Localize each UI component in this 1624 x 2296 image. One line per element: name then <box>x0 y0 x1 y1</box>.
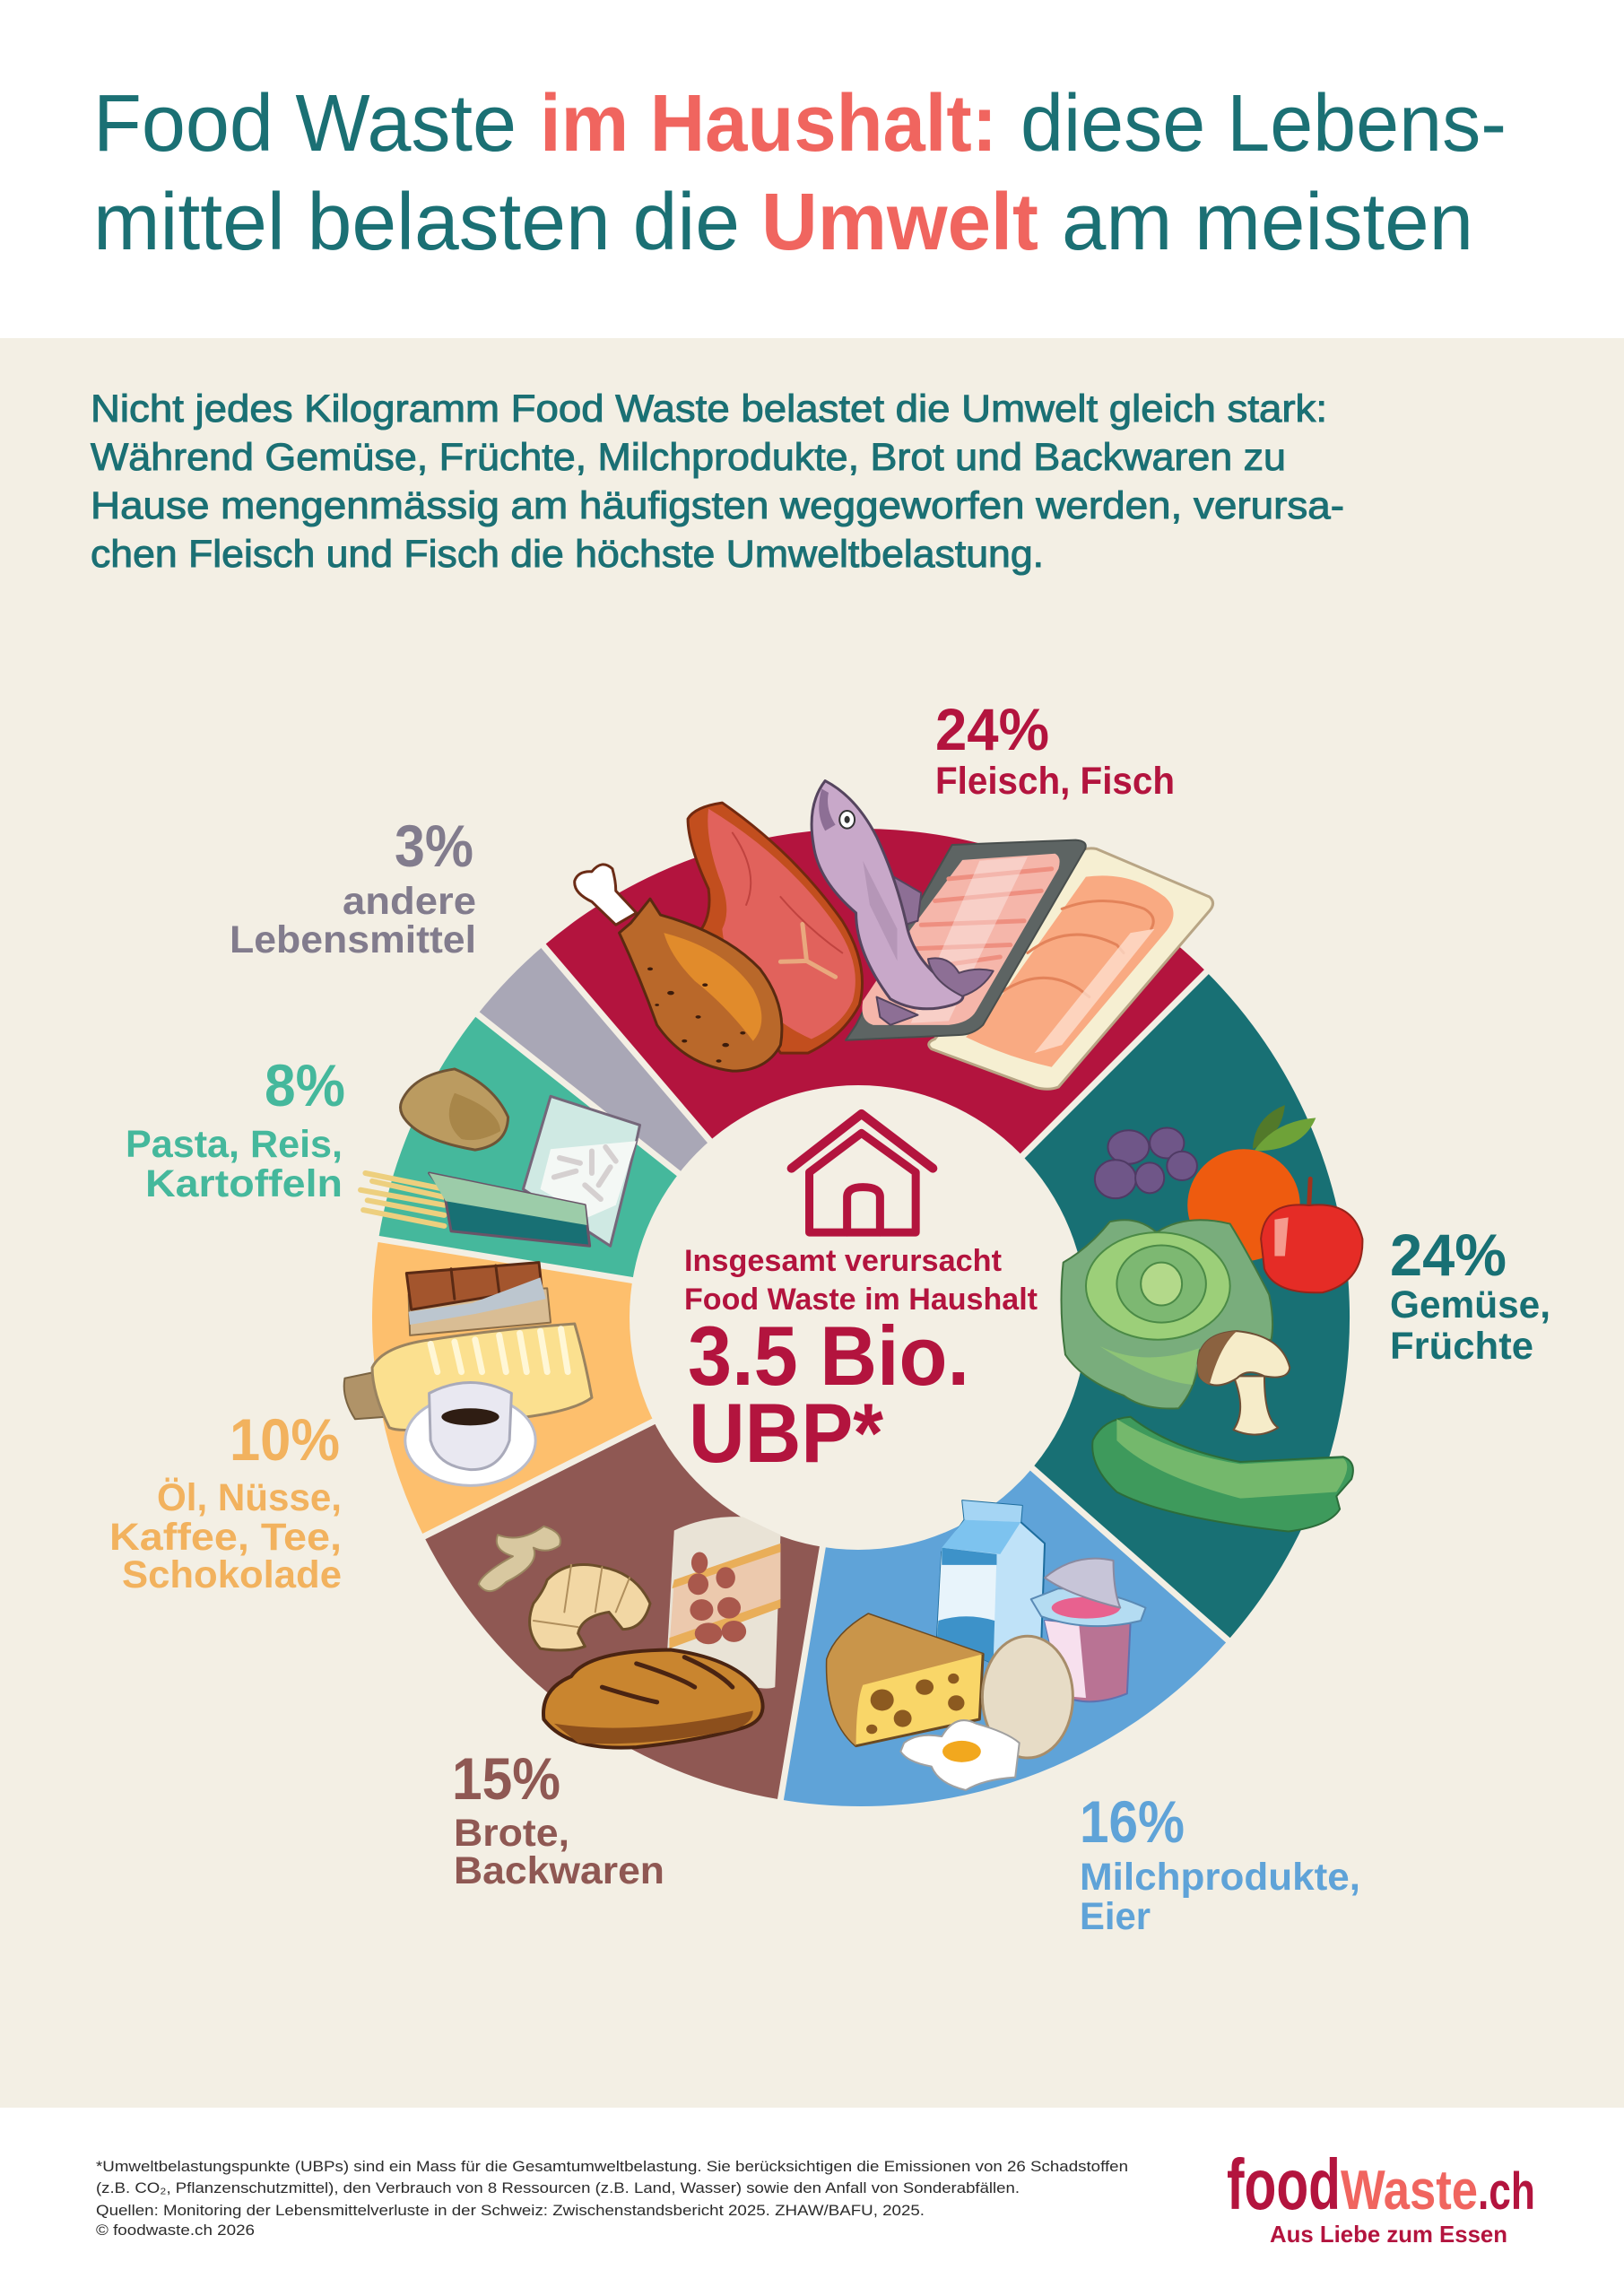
label: Milchprodukte, Eier: 16% <box>1080 1788 1185 1855</box>
label: Öl, Nüsse, Kaffee, Tee, Schokolade: Öl, Nüsse, <box>157 1476 342 1519</box>
food illustrations: lower ring <box>344 1178 1362 1790</box>
icon: bread bag <box>667 1517 780 1689</box>
label: andere Lebensmittel: andere <box>343 880 476 923</box>
icon: chicken leg <box>575 865 782 1071</box>
icon: salmon tray <box>929 848 1213 1089</box>
footnote: © foodwaste.ch 2026 <box>96 2222 255 2239</box>
footnote: Quellen: Monitoring der Lebensmittelverluste in der Schweiz: Zwischenstandsbericht 2025. ZHAW/BAFU, 2025. <box>96 2202 925 2219</box>
icon: blueberries <box>1095 1128 1197 1198</box>
intro text: Hause mengenmässig am häufigsten weggeworfen werden, verursa- <box>91 484 1344 527</box>
donut chart <box>365 829 1350 1813</box>
icon: egg <box>982 1636 1073 1758</box>
logo: foodWaste.ch: .ch <box>1478 2162 1535 2221</box>
label: Brote, Backwaren: Backwaren <box>454 1849 664 1892</box>
icon: peanuts <box>479 1526 560 1591</box>
footnote <box>96 2158 1128 2239</box>
segment: Pasta, Reis, Kartoffeln 8% <box>378 1014 692 1283</box>
centre text: Food Waste im Haushalt <box>684 1283 1038 1317</box>
segment: Fleisch, Fisch 24% <box>543 829 1206 1165</box>
label: Gemüse, Früchte <box>1390 1222 1550 1368</box>
centre text: Insgesamt verursacht <box>684 1244 1002 1278</box>
intro text <box>91 387 1344 576</box>
centre text: UBP* <box>689 1386 883 1480</box>
centre text: 3.5 Bio. <box>688 1309 969 1403</box>
icon: rice box <box>523 1096 640 1246</box>
logo: foodWaste.ch: food <box>1227 2144 1341 2224</box>
label: Pasta, Reis, Kartoffeln <box>126 1052 345 1205</box>
icon: mushroom <box>1197 1331 1290 1435</box>
label: Pasta, Reis, Kartoffeln: 8% <box>265 1052 345 1118</box>
segment: Öl, Nüsse, Kaffee, Tee, Schokolade 10% <box>372 1239 668 1536</box>
title: mittel belasten die <box>93 178 740 267</box>
icon: yogurt <box>1031 1559 1146 1701</box>
icon: bacon tray <box>846 840 1086 1040</box>
icon: croissant <box>530 1564 650 1650</box>
icon: orange <box>1187 1105 1316 1261</box>
donut centre <box>630 1085 1087 1550</box>
label: Brote, Backwaren: 15% <box>452 1745 560 1812</box>
icon: potato <box>401 1069 508 1150</box>
icon: steak <box>688 803 863 1053</box>
label: Pasta, Reis, Kartoffeln: Pasta, Reis, <box>126 1123 343 1166</box>
label: Gemüse, Früchte: 24% <box>1390 1222 1507 1288</box>
segment: Gemüse, Früchte 24% <box>1013 972 1350 1640</box>
label: Milchprodukte, Eier <box>1080 1788 1360 1938</box>
icon: bread loaf <box>543 1650 763 1748</box>
icon: milk carton <box>937 1500 1045 1664</box>
label: Fleisch, Fisch: Fleisch, Fisch <box>935 760 1175 803</box>
title: im Haushalt: <box>540 79 997 169</box>
label: andere Lebensmittel: 3% <box>395 813 473 879</box>
logo: foodWaste.ch: Aus Liebe zum Essen <box>1270 2221 1507 2248</box>
icon: zucchini <box>1092 1417 1353 1532</box>
icon: spaghetti <box>360 1173 444 1226</box>
label: Gemüse, Früchte: Gemüse, <box>1390 1283 1550 1326</box>
label: Pasta, Reis, Kartoffeln: Kartoffeln <box>145 1162 343 1205</box>
centre text <box>684 1244 1038 1480</box>
label: andere Lebensmittel: Lebensmittel <box>230 918 476 961</box>
food illustrations: meat and fish <box>575 781 1213 1089</box>
intro text: Während Gemüse, Früchte, Milchprodukte, Brot und Backwaren zu <box>91 436 1286 479</box>
segment: Brote, Backwaren 15% <box>424 1413 825 1799</box>
label: Fleisch, Fisch <box>935 696 1175 803</box>
icon: lettuce <box>1062 1220 1272 1409</box>
title <box>93 79 1507 267</box>
footnote: *Umweltbelastungspunkte (UBPs) sind ein Mass für die Gesamtumweltbelastung. Sie berücksichtigen die Emissionen von 26 Schadstoffen <box>96 2158 1128 2175</box>
label: Milchprodukte, Eier: Milchprodukte, <box>1080 1856 1360 1899</box>
title: Food Waste <box>93 79 517 169</box>
segment: andere Lebensmittel 3% <box>477 946 721 1184</box>
panel: beige background <box>0 338 1624 2108</box>
icon: house <box>792 1114 933 1232</box>
intro text: Nicht jedes Kilogramm Food Waste belastet die Umwelt gleich stark: <box>91 387 1327 430</box>
icon: fish <box>812 781 994 1025</box>
label: Brote, Backwaren <box>452 1745 664 1892</box>
title: Umwelt <box>761 178 1038 267</box>
icon: chocolate bar <box>406 1263 551 1335</box>
logo: foodWaste.ch <box>1227 2144 1535 2248</box>
title: diese Lebens- <box>1020 79 1507 169</box>
icon: coffee cup <box>405 1383 535 1485</box>
label: Öl, Nüsse, Kaffee, Tee, Schokolade: Schokolade <box>122 1553 342 1596</box>
label: Fleisch, Fisch: 24% <box>935 696 1049 762</box>
icon: cheese <box>827 1614 983 1746</box>
footnote: (z.B. CO₂, Pflanzenschutzmittel), den Verbrauch von 8 Ressourcen (z.B. Land, Wasser) sowie den Anfall von Sonderabfällen. <box>96 2179 1020 2196</box>
label: Öl, Nüsse, Kaffee, Tee, Schokolade: Kaffee, Tee, <box>109 1516 342 1559</box>
icon: apple <box>1261 1178 1362 1292</box>
segment: Milchprodukte, Eier 16% <box>780 1459 1229 1806</box>
label: Milchprodukte, Eier: Eier <box>1080 1895 1151 1938</box>
food illustrations: grains, fruit top <box>360 1069 1316 1261</box>
title: am meisten <box>1062 178 1473 267</box>
label: Brote, Backwaren: Brote, <box>454 1812 569 1855</box>
intro text: chen Fleisch und Fisch die höchste Umweltbelastung. <box>91 533 1044 576</box>
label: andere Lebensmittel <box>230 813 476 961</box>
icon: oil bottle <box>344 1324 592 1430</box>
icon: fried egg <box>900 1720 1020 1790</box>
label: Öl, Nüsse, Kaffee, Tee, Schokolade: 10% <box>230 1406 340 1473</box>
label: Öl, Nüsse, Kaffee, Tee, Schokolade <box>109 1406 342 1596</box>
logo: foodWaste.ch: Waste <box>1341 2160 1478 2222</box>
icon: pasta box <box>430 1173 590 1246</box>
label: Gemüse, Früchte: Früchte <box>1390 1325 1533 1368</box>
